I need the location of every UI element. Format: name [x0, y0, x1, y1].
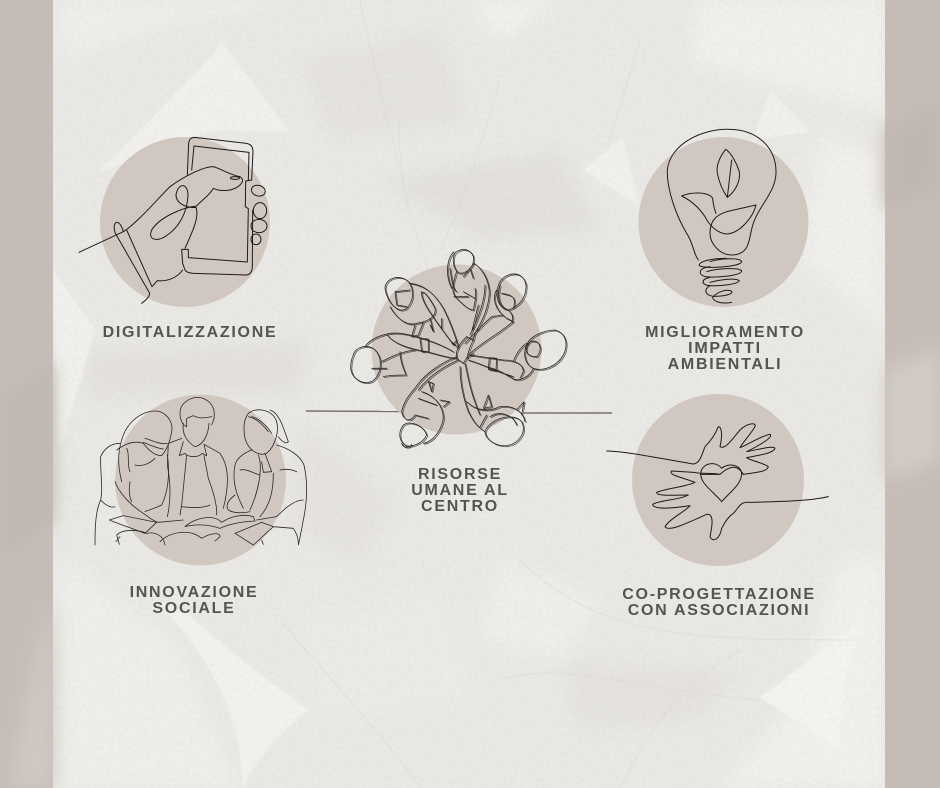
person: upper left [385, 277, 458, 348]
icon: risorse umane al centro, team seen from above [351, 250, 567, 448]
connecting line right [524, 412, 612, 414]
label: co-progettazione con associazioni: CO-PROGETTAZIONE [622, 586, 816, 603]
label: risorse umane al centro: UMANE AL [411, 482, 509, 499]
label: miglioramento impatti ambientali: AMBIENTALI [668, 356, 782, 373]
icon: co-progettazione con associazioni, two hands with heart [607, 394, 828, 566]
label: miglioramento impatti ambientali: IMPATTI [688, 340, 762, 357]
label: miglioramento impatti ambientali [645, 324, 805, 373]
icon: digitalizzazione, hand holding phone [79, 137, 270, 307]
label: innovazione sociale: INNOVAZIONE [130, 584, 258, 601]
books and legs [109, 515, 298, 545]
icon: innovazione sociale, three people reading [95, 394, 307, 566]
person: left [351, 333, 457, 383]
label: innovazione sociale: SOCIALE [152, 600, 236, 617]
girl left [95, 411, 183, 545]
person: lower left [400, 357, 458, 447]
label: risorse umane al centro [411, 466, 509, 515]
label: co-progettazione con associazioni: CON ASSOCIAZIONI [628, 602, 810, 619]
label: digitalizzazione: DIGITALIZZAZIONE [103, 324, 277, 341]
boy [167, 397, 227, 517]
label: risorse umane al centro: RISORSE [418, 466, 502, 483]
icon: miglioramento impatti ambientali, lightbulb with plant [638, 129, 808, 307]
label: miglioramento impatti ambientali: MIGLIORAMENTO [645, 324, 805, 341]
person: top [447, 250, 489, 363]
person: right [467, 330, 566, 380]
person: upper right [465, 274, 526, 355]
connecting line left [306, 410, 402, 412]
label: co-progettazione con associazioni [622, 586, 816, 619]
label: innovazione sociale [130, 584, 258, 617]
person: lower right [460, 363, 525, 446]
girl right [227, 410, 307, 545]
label: risorse umane al centro: CENTRO [421, 498, 499, 515]
